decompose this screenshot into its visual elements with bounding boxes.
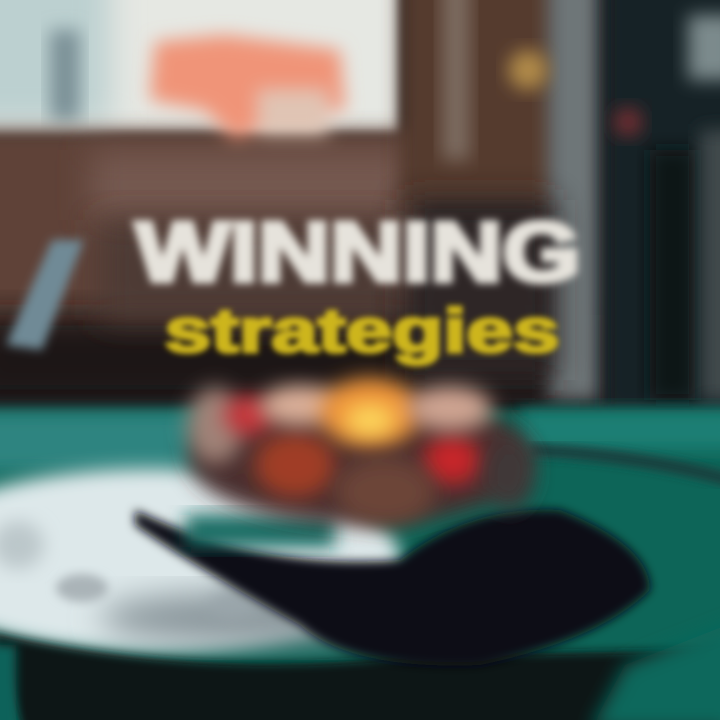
bowl of fruit [187, 378, 534, 526]
blue window pane left [6, 240, 84, 350]
white plate [0, 468, 400, 652]
orange window shape [150, 35, 345, 140]
dark foreground rim [0, 620, 720, 720]
right wooden columns and dark panel [400, 0, 720, 410]
title: winning: WINNING [136, 205, 580, 299]
subtitle in yellow: strategies [164, 297, 560, 366]
dark plate [135, 510, 650, 666]
teal table [0, 410, 720, 720]
